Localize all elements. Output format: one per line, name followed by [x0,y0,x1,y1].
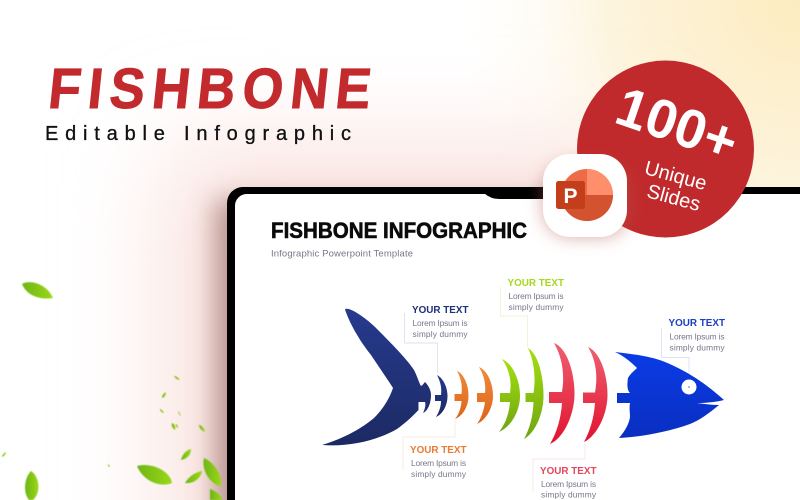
connector lines [403,287,689,492]
fish tail [322,309,431,445]
callout: blue: YOUR TEXT [668,317,726,329]
callout: green: Lorem Ipsum is [508,291,564,301]
badge: 100+ unique slides: Slides [644,181,703,216]
laptop frame [227,187,800,500]
callout: navy: Lorem Ipsum is [412,318,468,328]
subtitle: Editable Infographic [45,123,351,145]
callout: red: Lorem Ipsum is [541,479,596,489]
callout: navy [412,304,469,339]
rib: orange 2 [477,367,493,424]
callout: orange [410,444,467,479]
leaves [2,282,222,500]
rib: green 2 [524,348,544,439]
callout: navy: simply dummy [412,329,468,339]
callout: navy: YOUR TEXT [412,304,469,316]
fishbone diagram [322,287,724,492]
icon: PowerPoint [543,154,628,237]
callout: blue: Lorem Ipsum is [670,332,724,342]
fish head [615,352,724,438]
callout: green: simply dummy [508,302,564,312]
callout: green: YOUR TEXT [508,277,565,289]
callout: red: YOUR TEXT [540,465,597,477]
rib: red 1 [549,343,574,444]
badge: 100+ unique slides [577,60,754,238]
rib: red 2 [583,347,608,442]
rib: green 1 [499,359,520,432]
callout: orange: simply dummy [411,469,467,479]
fish eye [682,380,696,394]
slide subheading: Infographic Powerpoint Template [271,248,413,260]
rib: orange 1 [454,371,468,419]
callout: blue [668,317,726,352]
icon: PowerPoint: P [563,185,578,208]
badge: 100+ unique slides: 100+ [609,75,746,174]
callout: green [508,277,565,312]
callout: orange: YOUR TEXT [410,444,467,456]
title: FISHBONE: FISHBONE [46,56,374,120]
callout: blue: simply dummy [670,342,725,352]
slide heading: FISHBONE INFOGRAPHIC [271,218,527,243]
rib: navy [435,375,448,417]
badge: 100+ unique slides: Unique [642,157,709,195]
callout: red [540,465,597,500]
callout: orange: Lorem Ipsum is [411,458,466,468]
callout: red: simply dummy [541,490,597,500]
